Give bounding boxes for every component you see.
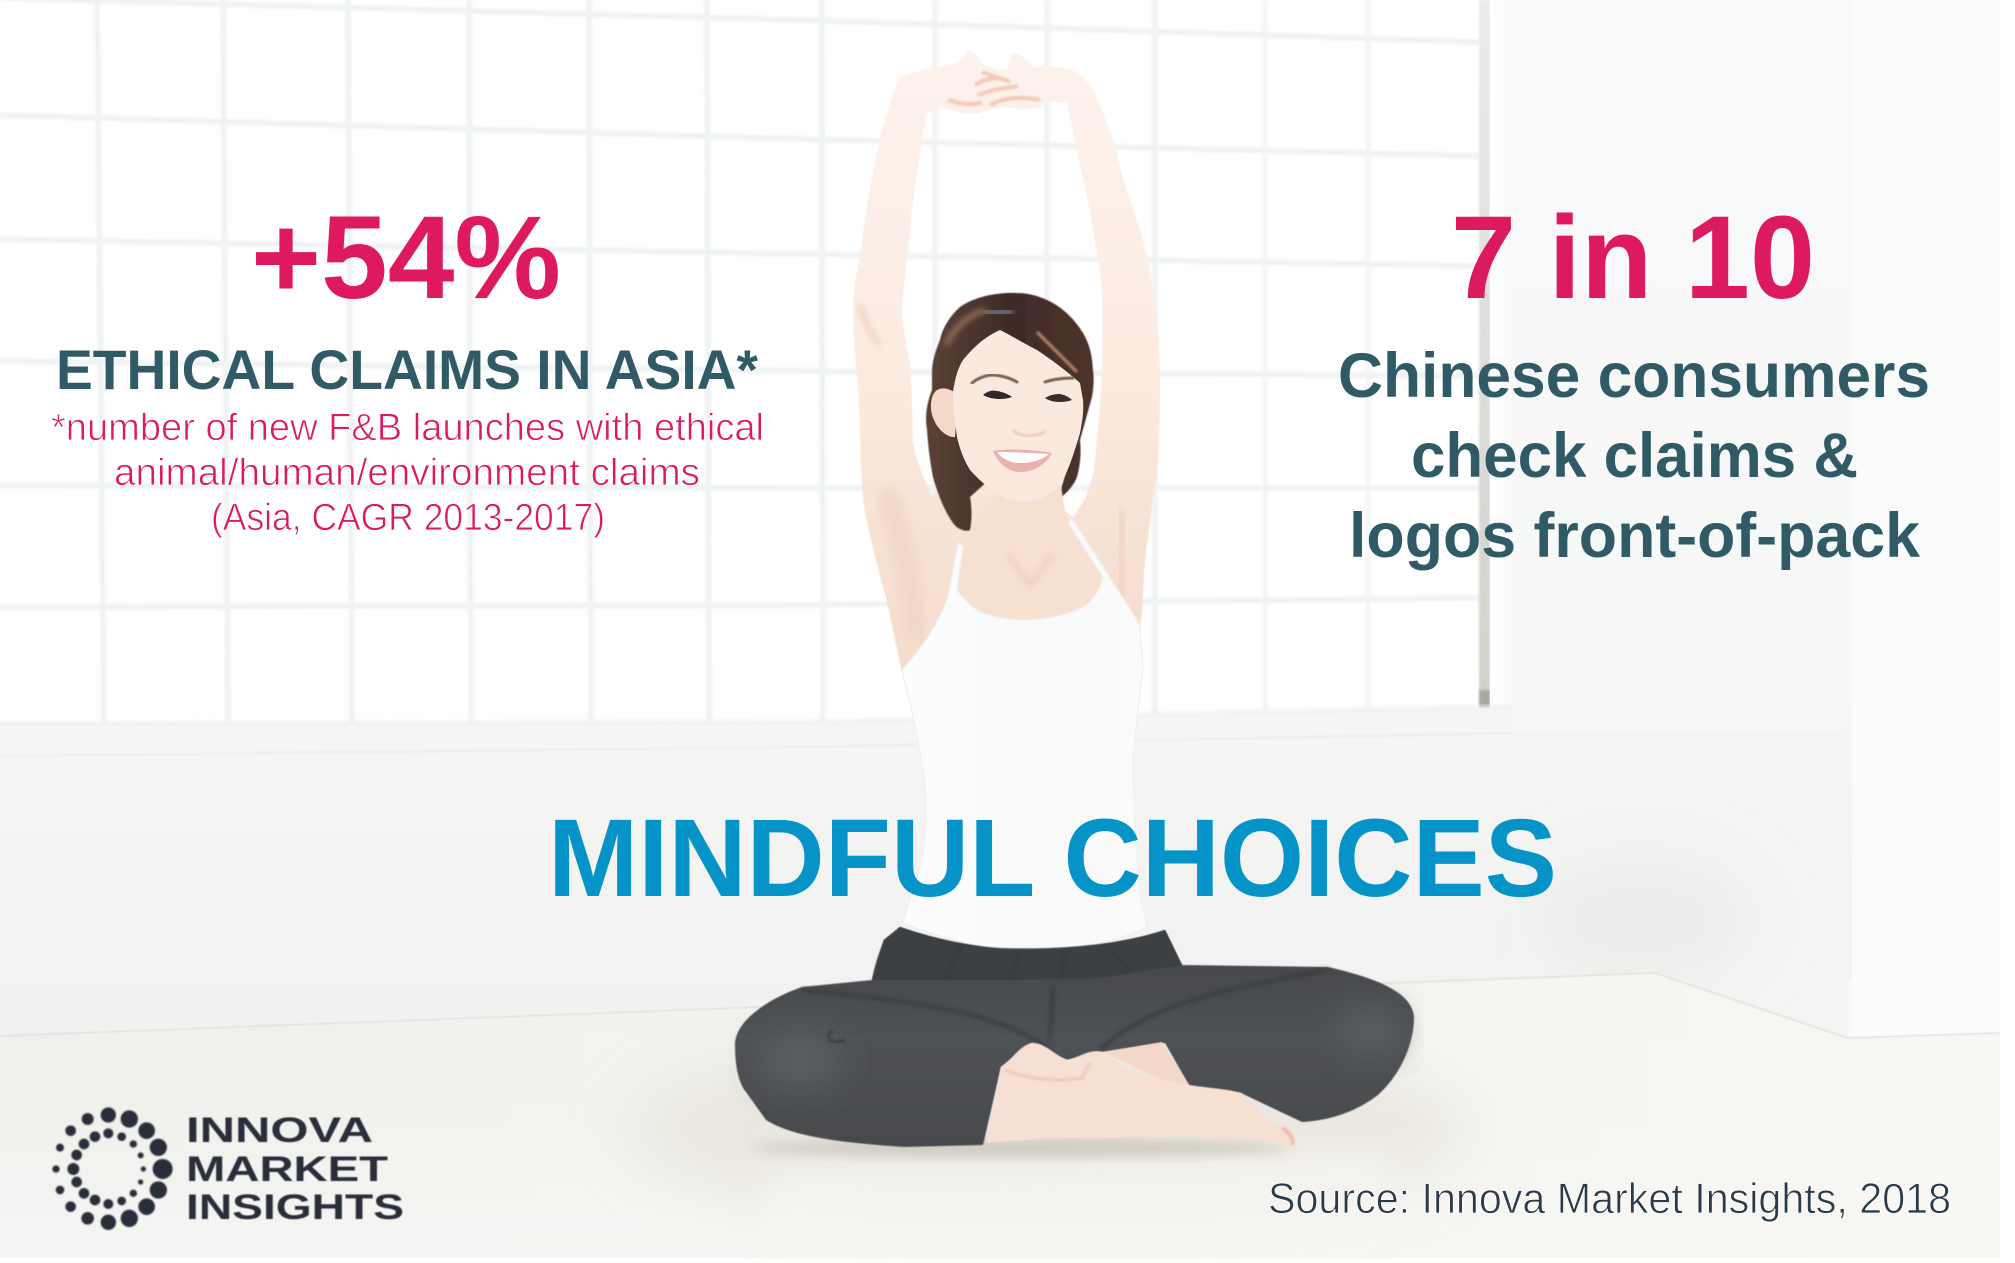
right wall [1512, 0, 2000, 980]
face [931, 330, 1083, 501]
heading: ethical claims in Asia: ETHICAL CLAIMS IN ASIA* [56, 338, 758, 401]
eyebrows [972, 375, 1073, 383]
logo wordmark [186, 1111, 404, 1227]
neck and chest [955, 480, 1107, 625]
floor shadow [750, 1139, 1290, 1157]
window frame [1479, 0, 1490, 708]
trousers [735, 927, 1414, 1147]
floor [0, 973, 2000, 1258]
footnote text: animal/human/environment claims [114, 452, 700, 494]
arms and upper body [853, 50, 1160, 672]
window panes [0, 0, 1480, 722]
window sill [0, 707, 1515, 756]
logo wordmark: INSIGHTS [186, 1188, 404, 1227]
text: Chinese consumers check claims: Chinese consumers [1338, 341, 1930, 411]
footnote text [51, 407, 764, 539]
eyes [983, 391, 1012, 399]
interlocked fingers [948, 72, 1040, 105]
logo wordmark: MARKET [186, 1150, 388, 1189]
text: Chinese consumers check claims: check claims & [1411, 421, 1858, 491]
text: Chinese consumers check claims [1338, 341, 1930, 571]
bare feet [986, 1042, 1295, 1146]
wall beneath window [0, 731, 1660, 1036]
logo wordmark: INNOVA [186, 1111, 373, 1150]
text: Chinese consumers check claims: logos front-of-pack [1349, 501, 1921, 571]
hair highlights [983, 311, 1013, 313]
smile [993, 450, 1052, 472]
waistband [872, 927, 1182, 980]
hair [926, 293, 1094, 531]
floor reflection [760, 1150, 1390, 1258]
nose [1013, 430, 1045, 436]
footnote text: (Asia, CAGR 2013-2017) [211, 497, 605, 539]
logo: Innova Market Insights [52, 1107, 404, 1230]
title: mindful choices: MINDFUL CHOICES [548, 797, 1557, 920]
white tank top [902, 519, 1147, 950]
statistic: 7 in 10: 7 in 10 [1451, 192, 1815, 324]
source line: Source: Innova Market Insights, 2018 [1268, 1175, 1951, 1223]
statistic: +54%: +54% [251, 192, 561, 324]
footnote text: *number of new F&B launches with ethical [51, 407, 764, 449]
fabric folds [802, 945, 1328, 1050]
logo dot ring [52, 1107, 173, 1230]
woman doing yoga stretch [735, 50, 1414, 1157]
